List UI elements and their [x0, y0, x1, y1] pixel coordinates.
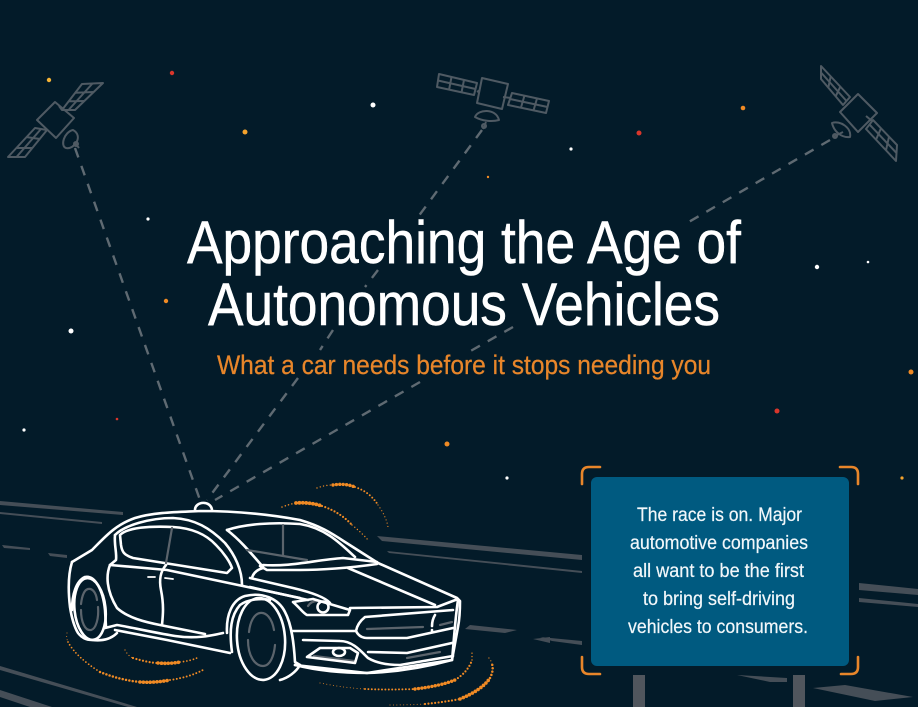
side windows and doors — [108, 518, 458, 634]
title: Autonomous Vehicles — [208, 271, 720, 338]
sign posts — [633, 675, 805, 707]
sign text — [628, 505, 808, 638]
fog lamp — [307, 648, 358, 663]
sign text: vehicles to consumers. — [628, 617, 808, 638]
stars — [22, 71, 913, 480]
gray interior lines — [166, 525, 452, 661]
subtitle: What a car needs before it stops needing you — [217, 350, 711, 380]
sign corner brackets — [582, 467, 858, 674]
body outline — [69, 511, 460, 680]
dashed signal lines — [75, 130, 830, 500]
satellite middle — [437, 74, 549, 129]
sign panel — [591, 477, 849, 666]
wheels — [71, 577, 288, 682]
sign text: automotive companies — [630, 533, 808, 554]
sign text: The race is on. Major — [637, 505, 803, 526]
sign text: to bring self-driving — [643, 589, 795, 610]
title: Approaching the Age of — [187, 209, 741, 276]
headlight — [293, 599, 350, 615]
car — [69, 503, 460, 682]
satellite left — [8, 83, 103, 157]
road markings — [0, 501, 918, 707]
grille — [293, 600, 458, 673]
sign text: all want to be the first — [633, 561, 805, 582]
title — [187, 209, 741, 338]
satellite right — [821, 66, 897, 161]
roof sensor — [195, 503, 212, 510]
sensor dots — [67, 484, 493, 705]
